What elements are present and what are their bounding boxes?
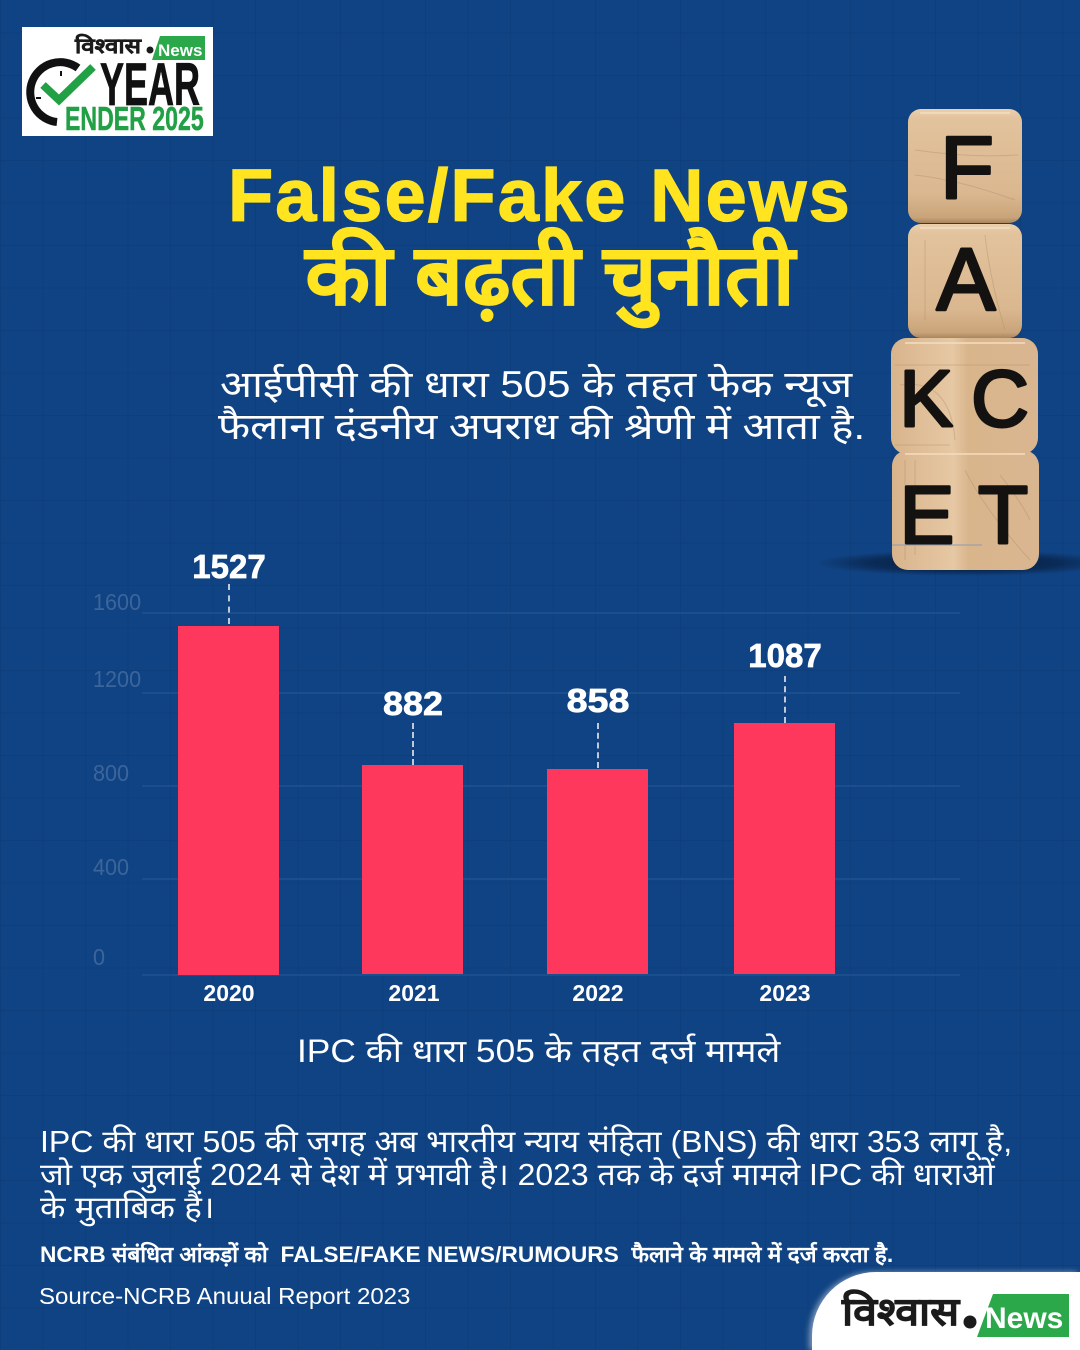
- y-axis labels: [93, 589, 141, 970]
- gridlines: [142, 612, 960, 976]
- y-axis labels: 1600: [93, 589, 141, 615]
- bar 2021: 882: [383, 685, 443, 722]
- icon: wooden FAKE cube stack: F: [940, 118, 994, 217]
- icon: wooden FAKE cube stack: T: [978, 470, 1028, 561]
- subtitle text: आईपीसी की धारा 505 के तहत फेक न्यूज: [220, 364, 852, 405]
- subtitle text: [218, 364, 865, 447]
- icon: wooden FAKE cube stack: E: [900, 470, 954, 561]
- bar 2021: [362, 685, 463, 1006]
- bar 2022: 858: [567, 682, 629, 719]
- bar 2021: 2021: [388, 980, 440, 1006]
- footer brand text: विश्वास: [842, 1291, 959, 1334]
- bar 2020: [178, 548, 279, 1006]
- footer News badge: News: [985, 1302, 1063, 1335]
- logo brand: Vishwas News: विश्वास: [75, 35, 141, 58]
- bar chart: [93, 548, 960, 1006]
- bar 2023: [734, 637, 835, 1006]
- NCRB note: NCRB संबंधित आंकड़ों को FALSE/FAKE NEWS/RUMOURS फैलाने के मामले में दर्ज करता है.: [40, 1242, 893, 1267]
- note paragraph: के मुताबिक हैं।: [40, 1190, 214, 1225]
- source: Source-NCRB Anuual Report 2023: [39, 1283, 410, 1309]
- subtitle text: फैलाना दंडनीय अपराध की श्रेणी में आता है.: [218, 406, 865, 447]
- logo text: YEAR: YEAR: [100, 51, 200, 118]
- note paragraph: IPC की धारा 505 की जगह अब भारतीय न्याय संहिता (BNS) की धारा 353 लागू है,: [40, 1124, 1012, 1159]
- bar 2022: [547, 682, 648, 1006]
- icon: wooden FAKE cube stack: C: [971, 354, 1029, 443]
- y-axis labels: 800: [93, 760, 129, 786]
- y-axis labels: 0: [93, 944, 105, 970]
- note paragraph: [40, 1124, 1012, 1226]
- logo text: ENDER 2025: ENDER 2025: [65, 100, 204, 136]
- title: False/Fake News: [228, 154, 852, 237]
- y-axis labels: 1200: [93, 666, 141, 692]
- bar 2020: 2020: [203, 980, 255, 1006]
- bar 2023: 1087: [748, 637, 822, 674]
- logo brand: Vishwas News: News: [158, 41, 202, 60]
- icon: clock with check: [26, 58, 96, 126]
- y-axis labels: 400: [93, 854, 129, 880]
- footer News badge: [964, 1294, 1069, 1337]
- logo: Year Ender 2025: [22, 27, 213, 136]
- title: [228, 154, 852, 328]
- bar 2022: 2022: [572, 980, 624, 1006]
- title: की बढ़ती चुनौती: [305, 228, 795, 322]
- footer logo panel: [812, 1272, 1080, 1350]
- logo brand: Vishwas News: [74, 34, 205, 60]
- bar 2023: 2023: [759, 980, 811, 1006]
- note paragraph: जो एक जुलाई 2024 से देश में प्रभावी है। 2023 तक के दर्ज मामले IPC की धाराओं: [40, 1157, 995, 1192]
- icon: wooden FAKE cube stack: [825, 109, 1080, 575]
- icon: wooden FAKE cube stack: K: [899, 354, 953, 443]
- icon: wooden FAKE cube stack: A: [937, 230, 996, 329]
- bar 2020: 1527: [192, 548, 266, 585]
- chart caption: IPC की धारा 505 के तहत दर्ज मामले: [297, 1033, 780, 1069]
